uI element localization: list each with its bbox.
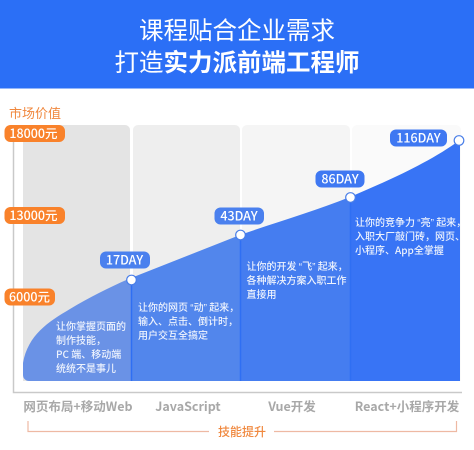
title line 2: 打造实力派前端工程师 <box>114 44 360 79</box>
skill labels <box>23 396 460 415</box>
text: stage 1 description <box>56 318 126 375</box>
day tag: 86DAY: 86DAY <box>321 168 359 188</box>
text: stage 4 description: 让你的竞争力 “亮” 起来， <box>355 214 466 229</box>
text: stage 4 description <box>355 214 466 257</box>
skill labels: Vue开发 <box>267 396 316 415</box>
text: stage 1 description: 制作技能， <box>56 332 106 347</box>
skill bracket <box>28 421 456 432</box>
area chart <box>23 140 460 381</box>
text: stage 3 description: 直接用 <box>246 286 276 301</box>
salary tag: 18000: 18000元 <box>9 123 58 142</box>
salary tag: 6000: 6000元 <box>9 286 50 306</box>
text: stage 2 description: 输入、点击、倒计时， <box>138 313 238 328</box>
text: stage 2 description: 用户交互全搞定 <box>138 327 208 342</box>
area: stage 3 <box>240 197 350 381</box>
data points <box>127 136 464 285</box>
title line 1: 课程贴合企业需求 <box>139 12 335 47</box>
text: stage 3 description: 让你的开发 “飞” 起来， <box>246 258 348 273</box>
y axis title: 市场价值 <box>9 103 61 122</box>
text: stage 1 description: PC 端、移动端 <box>56 346 121 361</box>
text: stage 4 description: 小程序、App全掌握 <box>355 242 444 257</box>
skill labels: JavaScript <box>155 396 221 415</box>
text: stage 2 description <box>138 299 239 342</box>
header banner <box>0 0 474 88</box>
day tag: 17DAY: 17DAY <box>106 250 143 268</box>
text: stage 2 description: 让你的网页 “动” 起来， <box>138 299 239 314</box>
area: stage 4 <box>350 140 460 381</box>
salary tag: 13000: 13000元 <box>9 205 58 224</box>
skill labels: 网页布局+移动Web <box>23 396 133 415</box>
skill axis label: 技能提升 <box>218 423 266 440</box>
text: stage 1 description: 统统不是事儿 <box>56 360 116 375</box>
day tag: 116DAY: 116DAY <box>396 128 441 146</box>
text: stage 4 description: 入职大厂敲门砖，网页、 <box>355 228 465 243</box>
panel: column backgrounds <box>23 125 461 381</box>
column dividers <box>132 198 350 381</box>
chart axes <box>14 130 462 392</box>
text: stage 3 description: 各种解决方案入职工作 <box>246 272 346 287</box>
text: stage 1 description: 让你掌握页面的 <box>56 318 126 333</box>
text: stage 3 description <box>246 258 348 301</box>
skill labels: React+小程序开发 <box>355 396 460 415</box>
day tag: 43DAY: 43DAY <box>220 206 258 224</box>
area: stage 1 <box>23 278 131 381</box>
area: stage 2 <box>131 235 240 381</box>
